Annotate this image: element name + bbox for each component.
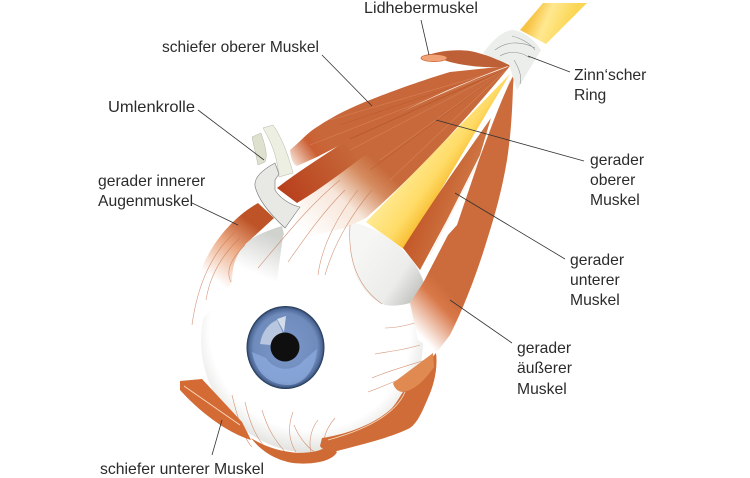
label: schiefer oberer Muskel: schiefer oberer Muskel [162,39,319,56]
leader lines [192,20,584,455]
label: gerader oberer Muskel: oberer [590,172,635,189]
tendon fibres [192,180,432,455]
Zinn'scher Ring [483,30,541,90]
muscle striations [310,68,512,255]
label: gerader äußerer Muskel: gerader [517,340,571,357]
eyeball [201,207,424,453]
muscle: gerader äußerer Muskel [410,74,514,352]
label: gerader unterer Muskel: unterer [570,272,620,289]
optic nerve [366,3,587,250]
muscle: schiefer oberer Muskel [290,66,508,166]
label: gerader oberer Muskel: Muskel [590,192,640,209]
label: gerader äußerer Muskel: äußerer [517,360,572,377]
Umlenkrolle [252,125,300,228]
label: schiefer unterer Muskel: schiefer unterer Muskel [100,461,264,478]
label: Umlenkrolle: Umlenkrolle [108,99,195,116]
iris [246,306,324,389]
pupil [270,332,300,362]
label: gerader unterer Muskel: gerader [570,252,624,269]
label: gerader innerer Augenmuskel: gerader innerer [98,173,205,190]
label: gerader innerer Augenmuskel: Augenmuskel [98,193,193,210]
label: gerader äußerer Muskel: Muskel [517,381,567,398]
label: gerader unterer Muskel: Muskel [570,292,620,309]
muscle: gerader oberer Muskel [277,66,510,242]
label: gerader oberer Muskel: gerader [590,152,644,169]
muscle: Lidhebermuskel [421,50,511,67]
muscle: gerader innerer Augenmuskel [192,203,274,325]
label: Zinn'scher Ring: Zinn‘scher [574,67,646,84]
muscle: schiefer unterer Muskel [180,353,437,464]
label: Zinn'scher Ring: Ring [574,87,606,104]
muscle: gerader unterer Muskel [403,118,491,270]
label: Lidhebermuskel: Lidhebermuskel [364,0,478,17]
